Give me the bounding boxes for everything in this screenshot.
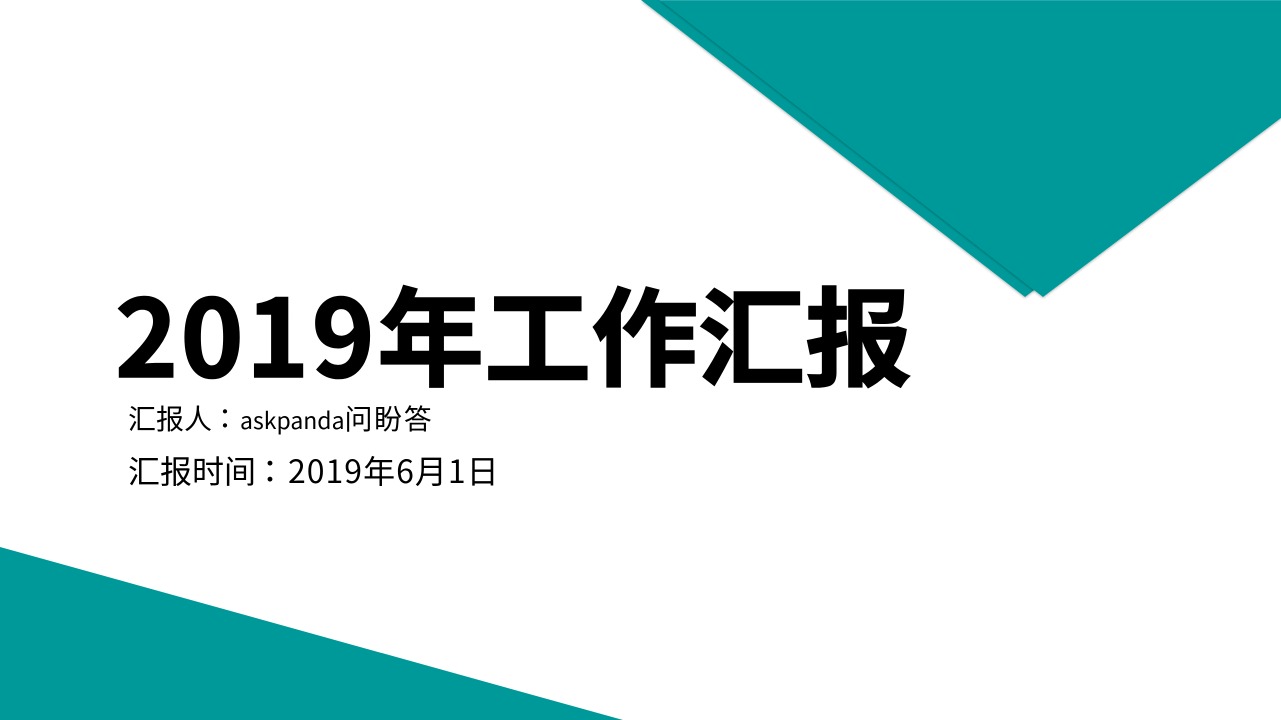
top right front polygon bbox=[660, 0, 1281, 297]
top right back triangle bbox=[641, 0, 1100, 297]
bottom left triangle bbox=[0, 547, 623, 720]
report date line: 汇报时间：2019年6月1日 bbox=[128, 445, 500, 493]
presenter line: 汇报人：askpanda问盼答 bbox=[128, 396, 433, 438]
title: 2019年工作汇报 bbox=[115, 253, 912, 408]
top edge highlight bbox=[660, 0, 1281, 1]
